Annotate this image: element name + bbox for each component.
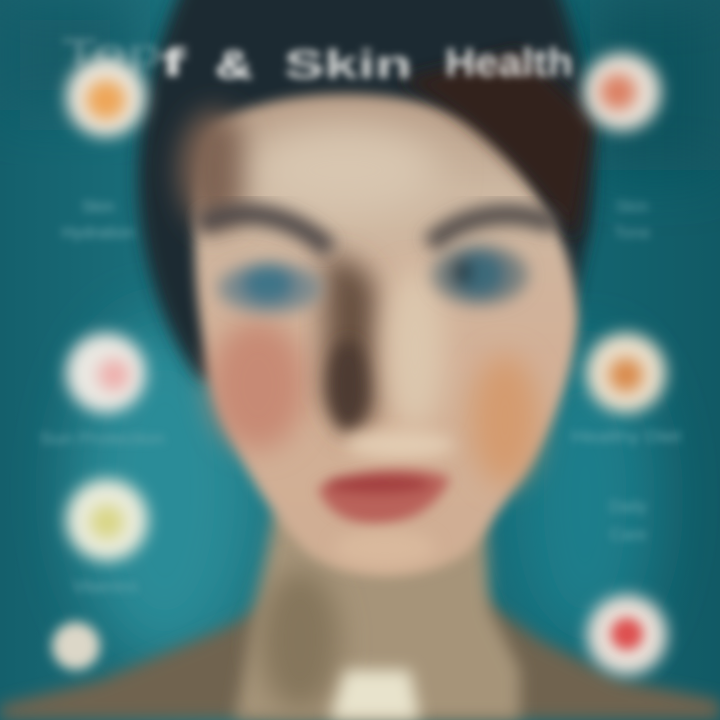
chest highlight — [330, 670, 420, 720]
caption: top left — [62, 197, 134, 242]
caption: top right: Skin — [615, 197, 649, 216]
brows — [200, 214, 555, 250]
caption: lower right — [609, 497, 647, 544]
caption: middle left: Sun Protection — [40, 429, 164, 448]
chin light — [335, 530, 435, 566]
caption: top left: Hydration — [62, 223, 134, 242]
title: & — [215, 43, 253, 87]
forehead light — [250, 125, 440, 215]
title — [62, 31, 573, 87]
icon: lower left yellow badge — [66, 479, 148, 561]
left eye — [218, 263, 322, 313]
nose light — [385, 270, 445, 430]
icon: middle right orange badge — [586, 333, 666, 413]
neck — [235, 510, 520, 720]
under nose — [345, 431, 455, 459]
right cheek — [471, 355, 539, 485]
caption: top left: Skin — [81, 197, 115, 216]
left cheek blush — [210, 320, 306, 450]
fringe — [400, 50, 595, 240]
face — [195, 94, 578, 576]
caption: top right — [614, 197, 650, 242]
forehead left shade — [180, 110, 250, 230]
caption: lower right: Care — [610, 525, 646, 544]
title: Top — [62, 31, 162, 75]
shoulders — [0, 590, 720, 720]
nose shadow — [325, 255, 378, 435]
title: Skin — [284, 43, 412, 87]
title: Health — [445, 41, 573, 85]
caption: middle right: Healthy Diet — [571, 427, 681, 446]
lips — [318, 470, 450, 525]
icon: top left orange badge — [66, 57, 146, 137]
hair — [138, 0, 594, 380]
caption: lower left: Vitamins — [73, 577, 137, 596]
icon: bottom left small badge — [52, 622, 100, 670]
icon: bottom right red badge — [587, 595, 667, 675]
caption: top right: Tone — [614, 223, 650, 242]
neck shadow — [260, 570, 340, 710]
caption: lower right: Daily — [609, 497, 647, 516]
title: f — [160, 41, 187, 85]
icon: top right coral badge — [583, 53, 661, 131]
icon: middle left pink badge — [66, 333, 146, 413]
right eye — [432, 245, 528, 305]
nose shadow core — [328, 340, 368, 430]
